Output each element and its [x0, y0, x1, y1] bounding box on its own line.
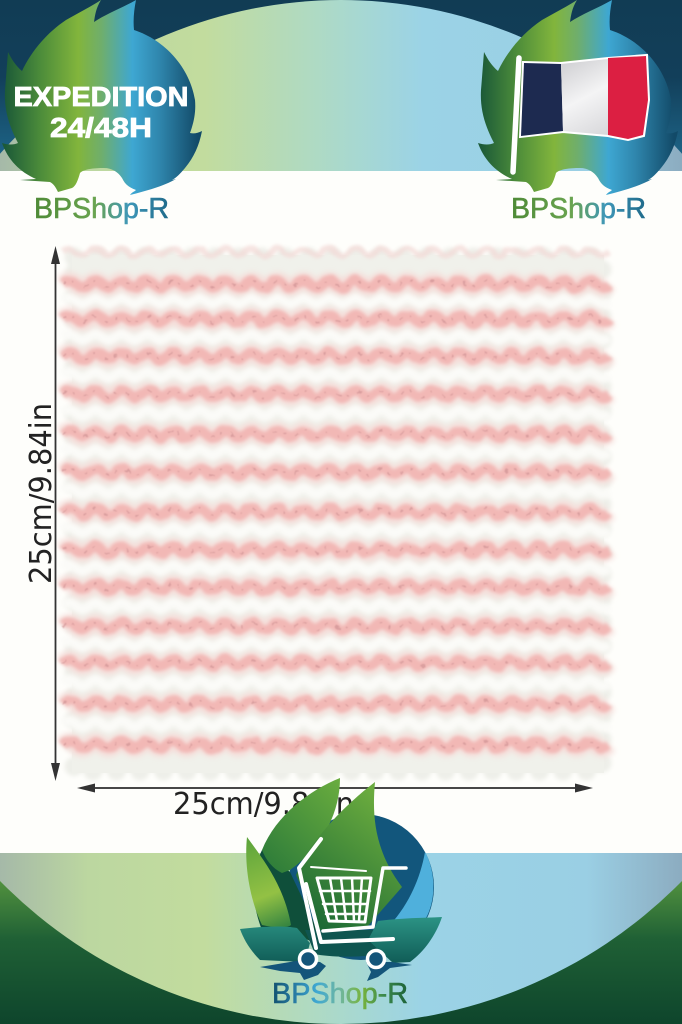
logo bottom dark band — [305, 930, 395, 957]
logo globe — [288, 814, 434, 960]
flag outline — [520, 55, 649, 140]
cloth white bands — [63, 298, 609, 727]
arrow: width dimension — [77, 784, 593, 792]
flag pole — [513, 58, 519, 172]
logo globe highlight — [390, 852, 433, 925]
brand name: bottom centre: BPShop-R — [272, 978, 408, 1010]
bottom banner — [0, 853, 682, 1024]
cloth pink stripes — [63, 281, 609, 748]
flag blue stripe — [521, 63, 563, 136]
flag white stripe — [561, 59, 608, 135]
product: striped cloth — [63, 249, 609, 773]
width label: 25cm/9.84in — [173, 787, 354, 822]
logo bottom left leaf — [240, 926, 310, 962]
cloth top edge stripe — [63, 249, 609, 255]
brand name: top left: BPShop-R — [34, 193, 169, 225]
cloth stripe texture — [63, 281, 609, 748]
top banner — [0, 0, 682, 171]
badge leaf shape — [478, 0, 678, 195]
badge text: 24/48H: 24/48H — [50, 112, 152, 143]
arrow: height dimension — [51, 246, 60, 781]
logo splash: left — [260, 961, 326, 980]
badge leaf shape — [2, 0, 202, 195]
badge: french flag — [478, 0, 678, 195]
logo left leaf — [246, 837, 291, 927]
cart right wheel — [368, 950, 384, 968]
badge text: EXPEDITION: EXPEDITION — [14, 81, 188, 112]
flag red stripe — [608, 56, 648, 139]
cart basket — [317, 878, 371, 922]
cart frame — [299, 839, 406, 968]
logo bottom right leaf — [368, 917, 442, 963]
cart left wheel — [300, 950, 316, 968]
logo main leaf — [296, 782, 402, 935]
logo dark shadow — [254, 850, 320, 945]
logo upper leaf — [262, 778, 340, 873]
logo: leaves and shopping cart — [240, 778, 442, 981]
cloth stripe halo — [63, 281, 609, 748]
height label: 25cm/9.84in — [24, 403, 59, 584]
brand name: top right: BPShop-R — [511, 193, 646, 225]
logo splash: right — [366, 962, 412, 981]
badge: delivery — [2, 0, 202, 195]
